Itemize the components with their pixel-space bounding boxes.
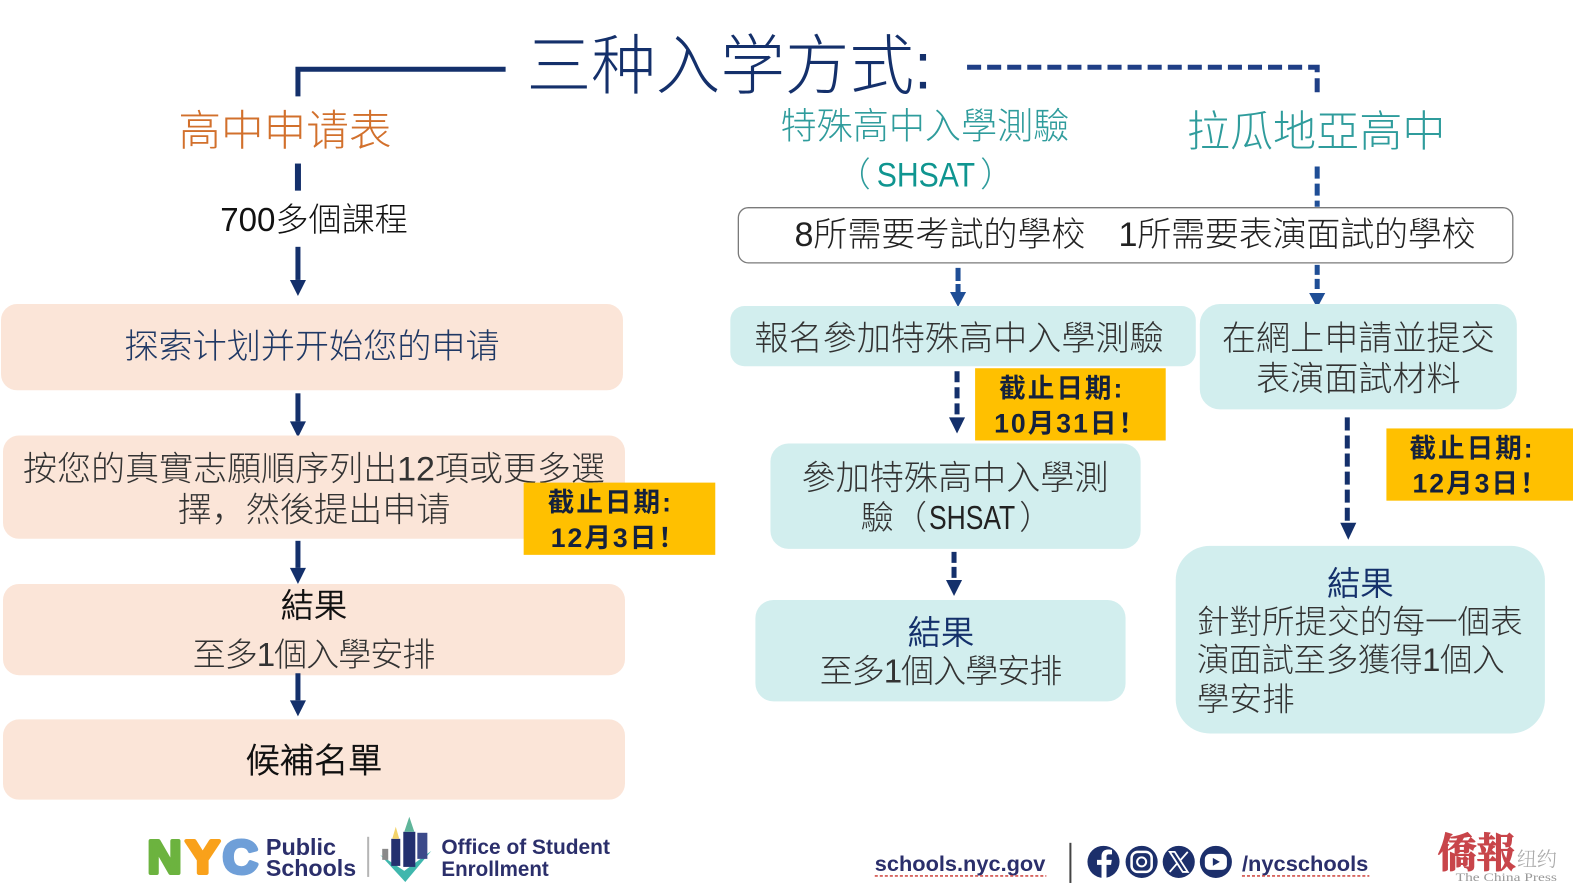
footer: social handle: /nycschools	[1242, 851, 1368, 876]
logo: NYC Public Schools: Public	[266, 834, 336, 860]
arrow: submission to result	[1340, 417, 1356, 540]
callout: deadline Dec 3	[524, 483, 715, 555]
heading: SHSAT: 特殊高中入學測驗	[781, 105, 1069, 146]
arrow: programs to explore	[290, 247, 306, 296]
box: SHSAT result	[755, 600, 1126, 701]
box: list choices: 擇，然後提出申请	[178, 492, 450, 530]
icon: Instagram	[1126, 846, 1158, 878]
panel: LaGuardia column	[1176, 108, 1573, 733]
logo: NYC Public Schools: Y	[186, 831, 220, 883]
heading: SHSAT: （	[837, 157, 871, 195]
heading: SHSAT: SHSAT	[877, 157, 975, 195]
logo: NYC Public Schools: Schools	[266, 855, 356, 881]
box: SHSAT result: 結果	[908, 615, 974, 652]
arrow: heading to schools box	[1315, 167, 1320, 207]
box: waitlist	[3, 719, 625, 800]
box: number of schools: 8所需要考試的學校	[795, 216, 1085, 254]
callout: deadline Dec 3: 12月3日！	[1412, 469, 1549, 499]
box: take SHSAT: SHSAT	[929, 500, 1015, 537]
arrow: heading connector	[295, 164, 301, 191]
icon: Facebook	[1087, 846, 1120, 878]
box: submit audition online	[1200, 304, 1517, 409]
panel: SHSAT column	[730, 105, 1513, 701]
box: result: 至多1個入學安排	[193, 637, 435, 674]
logo: NYC Public Schools: N	[147, 831, 182, 883]
callout: deadline Oct 31: 10月31日！	[994, 408, 1147, 438]
heading: high school application: 高中申请表	[178, 107, 391, 155]
box: audition result: 演面試至多獲得1個入	[1197, 641, 1505, 678]
heading: LaGuardia High School: 拉瓜地亞高中	[1187, 108, 1446, 156]
connector: title to left column	[298, 69, 506, 96]
logo: Office of Student Enrollment	[380, 817, 610, 882]
box: audition result	[1176, 546, 1545, 733]
box: waitlist: 候補名單	[246, 743, 382, 781]
box: register for SHSAT	[730, 306, 1196, 366]
box: submit audition online: 表演面試材料	[1256, 360, 1461, 398]
box: explore: 探索计划并开始您的申请	[124, 328, 500, 366]
panel: high school application column	[1, 107, 715, 800]
title: 三种入学方式:	[527, 29, 932, 102]
arrow: test to result	[946, 552, 962, 596]
box: take SHSAT	[770, 443, 1141, 549]
callout: deadline Dec 3: 12月3日！	[551, 523, 687, 553]
arrow: register to take test	[949, 371, 965, 433]
callout: deadline Dec 3: 截止日期:	[1409, 434, 1535, 464]
logo: NYC Public Schools	[147, 831, 369, 883]
box: result	[3, 584, 625, 675]
callout: deadline Oct 31: 截止日期:	[999, 373, 1124, 403]
box: register for SHSAT: 報名參加特殊高中入學測驗	[754, 320, 1164, 358]
box: explore	[1, 304, 623, 390]
arrow: schools to online submission	[1309, 265, 1325, 308]
logo: The China Press: 僑報	[1438, 822, 1516, 879]
logo: Office of Student Enrollment: Enrollment	[441, 856, 549, 881]
arrow: result to waitlist	[290, 673, 306, 716]
box: list choices	[3, 435, 625, 539]
callout: deadline Oct 31	[975, 368, 1166, 440]
box: audition result: 學安排	[1197, 680, 1295, 717]
arrow: list to result	[290, 541, 306, 584]
connector: title to right column (dashed)	[967, 67, 1317, 96]
icon: city skyline with check	[380, 817, 431, 882]
logo: The China Press: The China Press	[1456, 870, 1557, 884]
box: take SHSAT: 參加特殊高中入學測	[802, 460, 1109, 498]
logo: The China Press	[1438, 822, 1557, 884]
box: number of schools	[738, 208, 1513, 263]
callout: deadline Dec 3	[1386, 428, 1573, 501]
icon: YouTube	[1200, 846, 1232, 878]
box: audition result: 結果	[1327, 566, 1393, 603]
logo: Office of Student Enrollment: Office of Student	[441, 834, 610, 859]
box: result: 結果	[281, 588, 347, 625]
arrow: explore to list	[290, 393, 306, 437]
text: 700+ programs: 700多個課程	[220, 202, 408, 239]
logo: NYC Public Schools: C	[223, 831, 258, 883]
box: number of schools: 1所需要表演面試的學校	[1119, 216, 1476, 254]
box: list choices: 按您的真實志願順序列出12項或更多選	[23, 451, 605, 489]
heading: SHSAT	[781, 105, 1069, 195]
icon: X	[1163, 846, 1195, 878]
box: SHSAT result: 至多1個入學安排	[820, 653, 1062, 690]
callout: deadline Dec 3: 截止日期:	[548, 488, 673, 518]
footer: website: schools.nyc.gov	[875, 851, 1045, 876]
arrow: schools to register	[950, 268, 966, 307]
box: submit audition online: 在網上申請並提交	[1222, 320, 1495, 358]
box: audition result: 針對所提交的每一個表	[1197, 603, 1523, 640]
box: take SHSAT: 驗（	[861, 500, 927, 537]
heading: SHSAT: ）	[980, 157, 1014, 195]
logo: The China Press: 纽约	[1517, 843, 1557, 872]
box: take SHSAT: ）	[1019, 500, 1052, 537]
